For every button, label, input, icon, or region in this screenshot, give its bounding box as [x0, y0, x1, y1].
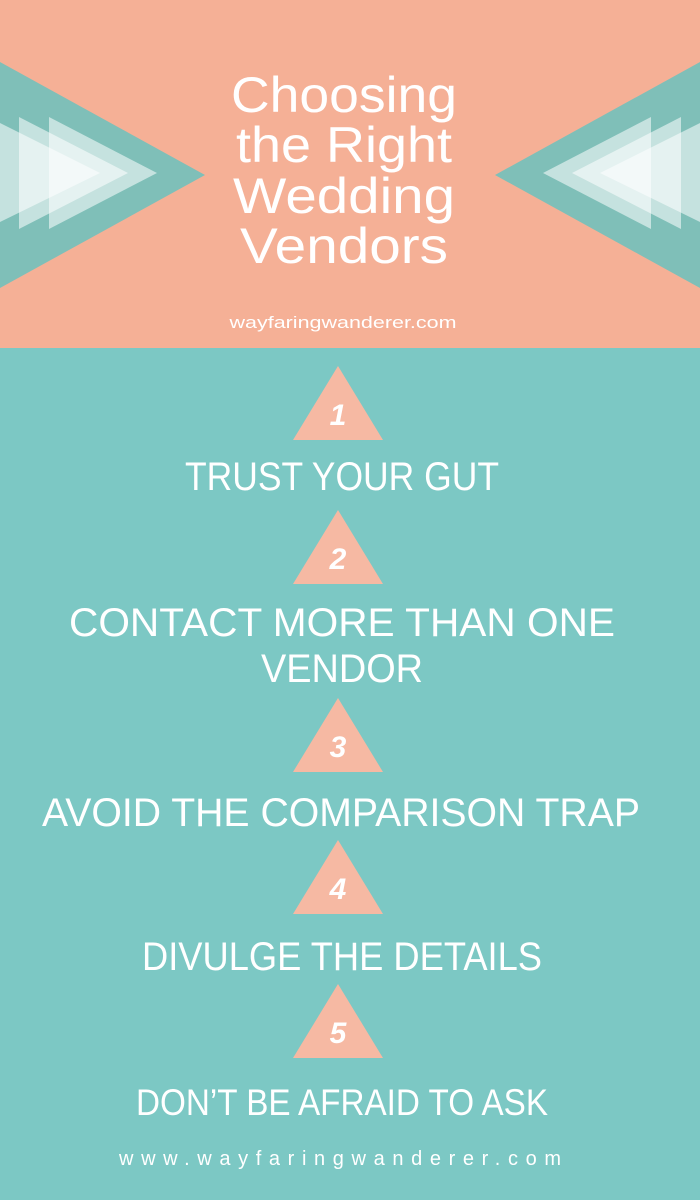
step 4 text: DIVULGE THE DETAILS: [142, 935, 542, 979]
step 5: [136, 984, 548, 1123]
step 2 text: [69, 601, 615, 691]
footer website: www.wayfaringwanderer.com: [118, 1148, 561, 1170]
step 3: [42, 698, 640, 835]
step 2: [69, 510, 615, 691]
step 2 text: CONTACT MORE THAN ONE: [69, 601, 615, 645]
icon: number triangle 3: [293, 698, 383, 772]
subtitle: website: wayfaringwanderer.com: [228, 313, 456, 332]
icon: number triangle 2: 2: [329, 543, 347, 576]
title: [231, 67, 457, 274]
title: the Right: [236, 117, 452, 173]
title: Vendors: [240, 218, 448, 274]
icon: number triangle 1: 1: [330, 399, 346, 432]
icon: number triangle 2: [293, 510, 383, 584]
icon: number triangle 5: 5: [330, 1017, 348, 1050]
icon: number triangle 1: [293, 366, 383, 440]
title: Choosing: [231, 67, 457, 123]
step 5 text: DON’T BE AFRAID TO ASK: [136, 1082, 548, 1123]
icon: right triangle arrows: [495, 62, 700, 288]
step 1: [185, 366, 499, 499]
icon: number triangle 4: 4: [329, 873, 347, 906]
step 2 text: VENDOR: [261, 647, 423, 691]
step 4: [142, 840, 542, 979]
header panel: [0, 0, 700, 348]
icon: left triangle arrows: [0, 62, 205, 288]
icon: number triangle 5: [293, 984, 383, 1058]
step 3 text: AVOID THE COMPARISON TRAP: [42, 791, 640, 835]
icon: number triangle 4: [293, 840, 383, 914]
step 1 text: TRUST YOUR GUT: [185, 455, 499, 499]
icon: number triangle 3: 3: [330, 731, 347, 764]
title: Wedding: [233, 168, 455, 224]
